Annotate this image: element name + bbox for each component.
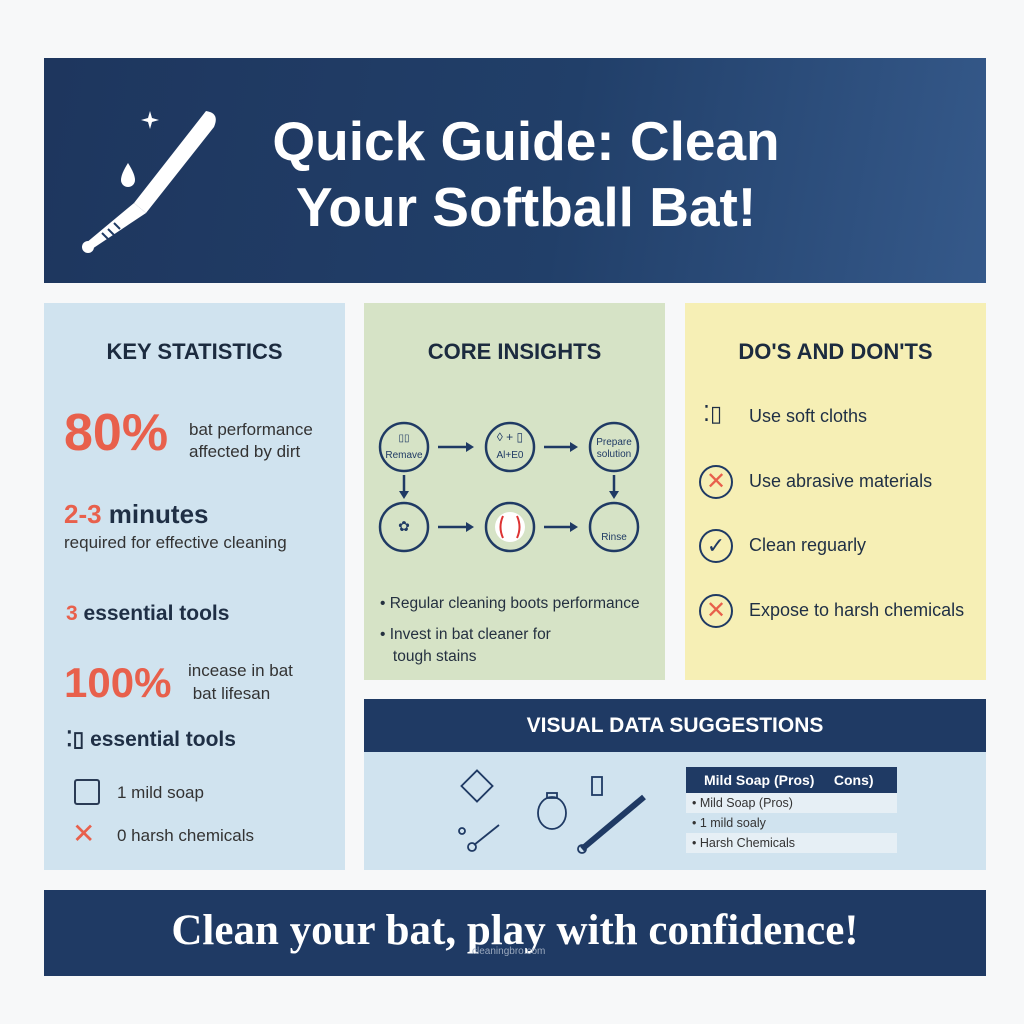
essential tools heading: ⁚▯ essential tools — [66, 728, 236, 751]
flow diagram: Prepare — [596, 437, 632, 448]
pros cons table — [686, 767, 897, 853]
footer banner — [44, 890, 986, 976]
item harsh chemicals: ✕ — [706, 597, 726, 624]
item soap — [74, 779, 204, 805]
flow diagram: Remave — [385, 450, 423, 461]
item soap: 1 mild soap — [117, 783, 204, 802]
stat 100%: bat lifesan — [193, 684, 270, 703]
item soft cloths — [703, 401, 867, 426]
bullet list: tough stains — [393, 648, 477, 665]
item abrasive: Use abrasive materials — [749, 471, 932, 491]
panel: core insights — [364, 303, 665, 680]
flow diagram: Rinse — [601, 532, 627, 543]
panel: dos and donts — [685, 303, 986, 680]
item harsh chemicals — [699, 594, 964, 628]
bullet list: • Invest in bat cleaner for — [380, 626, 551, 643]
footer banner: cleaningbro.com — [472, 946, 545, 957]
stat 100%: 100% — [64, 659, 171, 706]
stat 100%: incease in bat — [188, 661, 293, 680]
stat 80%: affected by dirt — [189, 442, 300, 461]
stat minutes — [64, 499, 287, 552]
bullet list: • Regular cleaning boots performance — [380, 595, 640, 612]
flow diagram: ◊ + ▯ — [497, 430, 523, 444]
stat 80%: 80% — [64, 404, 168, 462]
item abrasive — [699, 465, 932, 499]
heading bar: VISUAL DATA SUGGESTIONS — [527, 714, 823, 737]
item clean regularly: ✓ — [707, 533, 725, 558]
pros cons table: • 1 mild soaly — [692, 816, 766, 830]
flow diagram: ▯▯ — [398, 433, 410, 444]
item soft cloths: Use soft cloths — [749, 406, 867, 426]
item chemicals — [72, 818, 254, 849]
flow diagram: solution — [597, 449, 631, 460]
pros cons table: • Harsh Chemicals — [692, 836, 795, 850]
item clean regularly — [699, 529, 866, 563]
header banner — [44, 58, 986, 283]
icons — [458, 769, 646, 854]
flow diagram: Al+E0 — [497, 450, 524, 461]
heading: KEY STATISTICS — [106, 339, 283, 364]
flow diagram — [378, 422, 640, 552]
item abrasive: ✕ — [706, 468, 726, 495]
panel: visual data suggestions — [364, 699, 986, 870]
stat 80% — [64, 404, 313, 462]
footer banner: Clean your bat, play with confidence! — [171, 907, 859, 954]
item chemicals: 0 harsh chemicals — [117, 826, 254, 845]
heading bar — [364, 699, 986, 752]
stat minutes: required for effective cleaning — [64, 533, 287, 552]
icon: softball bat — [82, 111, 216, 253]
title: Your Softball Bat! — [296, 176, 756, 238]
stat 100% — [64, 659, 293, 706]
heading: DO'S AND DON'TS — [738, 339, 933, 364]
heading: CORE INSIGHTS — [428, 339, 601, 364]
stat 80%: bat performance — [189, 420, 313, 439]
item clean regularly: Clean reguarly — [749, 535, 866, 555]
item chemicals: ✕ — [72, 818, 95, 849]
bullet list — [380, 595, 640, 665]
pros cons table: • Mild Soap (Pros) — [692, 796, 793, 810]
panel: key statistics — [44, 303, 345, 870]
item soft cloths: ⁚▯ — [703, 401, 722, 426]
stat minutes: 2-3 minutes — [64, 499, 208, 529]
pros cons table: Mild Soap (Pros) Cons) — [704, 772, 874, 788]
title — [272, 110, 780, 238]
stat tools: 3 essential tools — [66, 602, 229, 625]
title: Quick Guide: Clean — [272, 110, 780, 172]
flow diagram: ✿ — [398, 518, 410, 534]
item harsh chemicals: Expose to harsh chemicals — [749, 600, 964, 620]
